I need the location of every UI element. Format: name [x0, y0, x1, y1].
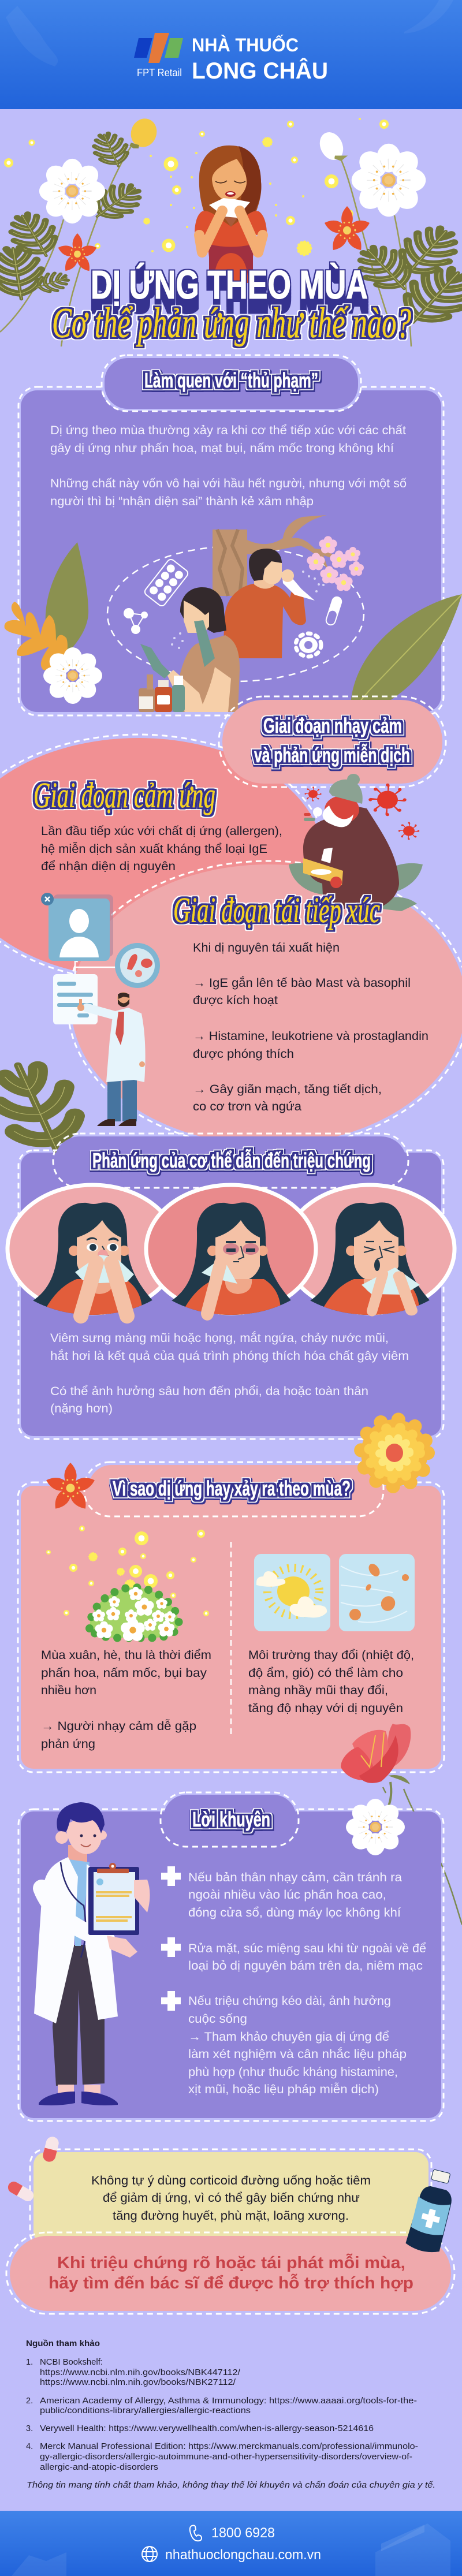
text: re-exposure: → Gây giãn mạch, tăng tiết dịch, [193, 1083, 382, 1096]
clipboard [88, 1863, 139, 1935]
right text: Môi trường thay đổi (nhiệt độ, [248, 1649, 414, 1662]
hero woman sneezing [195, 146, 267, 283]
hat [329, 780, 363, 804]
main title: DỊ ỨNG THEO MÙA [91, 262, 368, 307]
tissue box [303, 848, 343, 888]
right text: độ ẩm, gió) có thể làm cho [248, 1667, 403, 1680]
card: sun and clouds [254, 1554, 330, 1631]
right green leaf [351, 594, 462, 712]
logo: FPT Retail mark: FPT Retail [137, 67, 182, 79]
microscope cell circle [115, 943, 160, 988]
white daisy [346, 1799, 405, 1855]
text: re-exposure: → IgE gắn lên tế bào Mast và basophil [193, 976, 411, 990]
advice text: làm xét nghiệm và cân nhắc liệu pháp [188, 2048, 407, 2061]
hero floral stems and ferns [0, 131, 462, 346]
advice text: loại bỏ dị nguyên bám trên da, niêm mạc [188, 1959, 423, 1973]
body text [50, 424, 407, 508]
callout: corticoid warning: để giảm dị ứng, vì có thể gây biến chứng như [103, 2191, 360, 2205]
text: sensitization: hệ miễn dịch sản xuất kháng thể loại IgE [41, 842, 267, 856]
callout: see a doctor: Khi triệu chứng rõ hoặc tái phát mỗi mùa, [57, 2253, 405, 2272]
body text: người thì bị “nhận diện sai” thành kẻ xâm nhập [50, 495, 314, 508]
callout: corticoid warning [30, 2149, 431, 2247]
left text: phấn hoa, nấm mốc, bụi bay [41, 1667, 207, 1680]
long stem into advice section [383, 1787, 462, 1925]
card: wind and leaves [339, 1554, 415, 1631]
panel: getting to know the culprits [18, 355, 444, 715]
script heading: sensitization: Giai đoạn cảm ứng [33, 776, 215, 815]
sweater [303, 806, 399, 909]
callout: corticoid warning: Không tự ý dùng corticoid đường uống hoặc tiêm [91, 2174, 371, 2187]
text: re-exposure: được kích hoạt [193, 994, 278, 1007]
reference 2: American Academy of Allergy, Asthma & Immunology: https://www.aaaai.org/tools-for-the- [40, 2396, 417, 2406]
reference 2 [26, 2396, 417, 2415]
icon: phone [190, 2525, 202, 2541]
white daisy [43, 647, 102, 704]
body text [50, 1332, 409, 1415]
advice text: Rửa mặt, súc miệng sau khi từ ngoài về để [188, 1942, 426, 1955]
panel: why allergies are seasonal [18, 1462, 444, 1772]
advice text: cuộc sống [188, 2012, 247, 2026]
text: re-exposure: Khi dị nguyên tái xuất hiện [193, 941, 340, 955]
illustration: dashed ring [107, 546, 364, 681]
reference 1: 1. [26, 2358, 33, 2367]
icon: capsules [6, 2135, 60, 2204]
decorative leaves beside first panel [5, 542, 462, 712]
advice text: ngoài nhiều vào lúc phấn hoa cao, [188, 1888, 386, 1902]
portrait: stuffy nose [8, 1185, 177, 1317]
left text [41, 1649, 211, 1751]
reference 4 [26, 2442, 418, 2472]
heading: Làm quen với “thủ phạm” [144, 368, 318, 392]
flower: red poppy [341, 1724, 411, 1807]
footer band [0, 2511, 462, 2576]
viruses [305, 785, 418, 839]
advice text: phù hợp (như thuốc kháng histamine, [188, 2066, 398, 2079]
advice text: Nếu triệu chứng kéo dài, ảnh hưởng [188, 1995, 391, 2008]
doctor pointing [77, 992, 146, 1126]
body text: Viêm sưng màng mũi hoặc họng, mắt ngứa, chảy nước mũi, [50, 1332, 389, 1345]
right text [248, 1649, 414, 1715]
flower: red five-petal [44, 1463, 96, 1512]
fern bottom left [0, 1057, 91, 1161]
reference 1 [26, 2358, 241, 2387]
reference 4: allergic-and-atopic-disorders [40, 2463, 158, 2472]
text: sensitization: Lần đầu tiếp xúc với chất dị ứng (allergen), [41, 825, 282, 838]
reference 3: 3. [26, 2424, 33, 2433]
logo: FPT Retail mark [134, 33, 183, 79]
panel heading: sensitization and immune response [219, 696, 446, 787]
callout: corticoid warning: tăng đường huyết, phù mặt, loãng xương. [113, 2209, 349, 2223]
advice text: xịt mũi, hoặc liệu pháp miễn dịch) [188, 2083, 379, 2096]
body text: Có thể ảnh hưởng sâu hơn đến phổi, da hoặc toàn thân [50, 1385, 368, 1398]
left text: → Người nhạy cảm dễ gặp [41, 1720, 196, 1733]
reference 4: 4. [26, 2442, 33, 2451]
salmon blob: sensitization stage [0, 735, 327, 982]
icon: globe [142, 2547, 157, 2562]
panel heading: sensitization and immune response: Giai đoạn nhạy cảm [263, 714, 402, 737]
body text: (nặng hơn) [50, 1402, 113, 1415]
left text: Mùa xuân, hè, thu là thời điểm [41, 1649, 211, 1662]
face and tissue [325, 796, 359, 823]
logo wordmark [192, 35, 328, 84]
illustration: sneezing man [222, 549, 325, 658]
advice text: → Tham khảo chuyên gia dị ứng để [188, 2030, 389, 2044]
plus icons [161, 1866, 181, 2011]
references: Nguồn tham khảo [26, 2339, 100, 2348]
panel: advice [18, 1792, 444, 2121]
illustration: allergy icons [124, 558, 344, 657]
reference 4: Merck Manual Professional Edition: https://www.merckmanuals.com/professional/immunolo- [40, 2442, 418, 2451]
illustration: bottles [139, 674, 185, 712]
reference 2: 2. [26, 2396, 33, 2406]
logo wordmark: LONG CHÂU [192, 57, 328, 84]
heading: Lời khuyên [192, 1807, 270, 1831]
text: re-exposure: → Histamine, leukotriene và prostaglandin [193, 1030, 429, 1043]
reference 3: Verywell Health: https://www.verywellhealth.com/when-is-allergy-season-5214616 [40, 2424, 374, 2433]
reference 1: https://www.ncbi.nlm.nih.gov/books/NBK447112/ [40, 2368, 241, 2377]
bush with pollen [46, 1526, 209, 1641]
pollen dots [4, 118, 389, 255]
logo wordmark: NHÀ THUỐC [192, 35, 299, 55]
portrait: sneezing with closed eyes [285, 1185, 454, 1317]
profile card illustration [41, 893, 160, 1024]
portrait: itchy eyes [146, 1185, 316, 1317]
doctor with clipboard [34, 1802, 150, 2105]
icon: medicine bottle [405, 2167, 459, 2255]
text: sensitization: để nhận diện dị nguyên [41, 860, 176, 873]
text: re-exposure [193, 941, 429, 1113]
heading: Vì sao dị ứng hay xảy ra theo mùa? [113, 1477, 351, 1500]
reference 4: gy-allergic-disorders/allergic-autoimmune-and-other-hypersensitivity-disorders/overview-of- [40, 2452, 412, 2462]
callout: see a doctor [6, 2232, 454, 2314]
text: re-exposure: co cơ trơn và ngứa [193, 1100, 301, 1113]
leaves [289, 863, 423, 911]
advice text: đóng cửa sổ, dùng máy lọc không khí [188, 1906, 401, 1919]
centre divider [230, 1542, 232, 1736]
advice text: Nếu bản thân nhạy cảm, cần tránh ra [188, 1871, 402, 1884]
left text: nhiều hơn [41, 1684, 96, 1697]
text: sensitization [41, 825, 282, 873]
pills [304, 807, 322, 821]
disclaimer: Thông tin mang tính chất tham khảo, không thay thế lời khuyên và chẩn đoán của chuyên gia y tế. [27, 2481, 435, 2490]
body text: Những chất này vốn vô hại với hầu hết người, nhưng với một số [50, 477, 407, 490]
reference 1: https://www.ncbi.nlm.nih.gov/books/NBK27112/ [40, 2378, 236, 2387]
body text: gây dị ứng như phấn hoa, mạt bụi, nấm mốc trong không khí [50, 442, 394, 455]
callout: see a doctor: hãy tìm đến bác sĩ để được hỗ trợ thích hợp [49, 2273, 413, 2292]
flower buds [127, 115, 348, 164]
right text: tăng độ nhạy với dị nguyên [248, 1702, 403, 1715]
advice text [188, 1871, 426, 2096]
illustration: tree [213, 515, 346, 596]
reference 2: public/conditions-library/allergies/allergic-reactions [40, 2406, 251, 2415]
header band with logo [0, 0, 462, 109]
report sheet [53, 974, 98, 1024]
left green leaf [46, 542, 88, 658]
phone number: 1800 6928 [211, 2525, 275, 2541]
flower: yellow chrysanthemum [361, 1419, 428, 1486]
hero red flowers [57, 206, 371, 274]
illustration: woman with gloves [140, 587, 240, 712]
references [26, 2339, 435, 2490]
body text: Dị ứng theo mùa thường xảy ra khi cơ thể tiếp xúc với các chất [50, 424, 406, 437]
body text: hắt hơi là kết quả của quá trình phóng thích hóa chất gây viêm [50, 1349, 409, 1363]
website: nhathuoclongchau.com.vn [165, 2547, 321, 2563]
text: re-exposure: được phóng thích [193, 1047, 294, 1061]
right text: màng nhầy mũi thay đổi, [248, 1684, 388, 1697]
hero white daisies [39, 144, 426, 223]
illustration: blossoms [307, 536, 364, 591]
reference 1: NCBI Bookshelf: [40, 2358, 103, 2367]
pink blob: re-exposure stage [68, 861, 462, 1149]
panel: body reaction and symptoms [8, 1134, 454, 1439]
left text: phản ứng [41, 1738, 95, 1751]
flu man with tissue box and viruses [289, 774, 423, 911]
orange fern leaf [5, 602, 68, 673]
